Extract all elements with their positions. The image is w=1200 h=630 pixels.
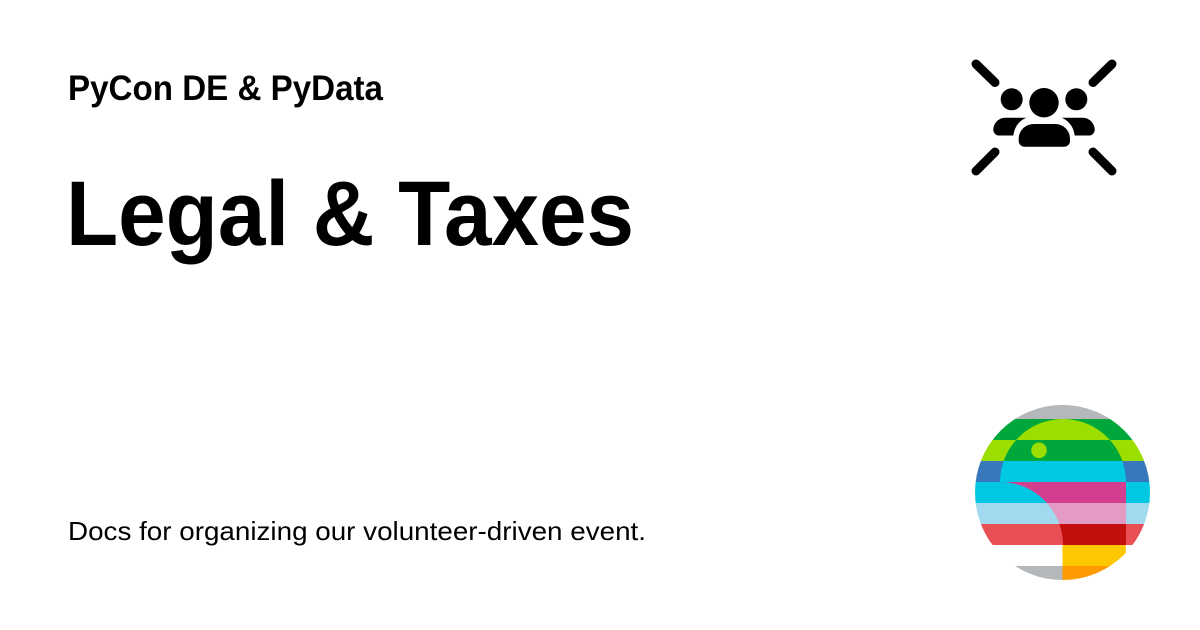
head quarter disc [1000, 482, 1063, 545]
logo: striped circular bird [975, 405, 1150, 580]
description: Docs for organizing our volunteer-driven event. [68, 516, 646, 546]
outer bands [975, 405, 1150, 545]
eye [1031, 442, 1047, 458]
social card [70, 60, 1150, 580]
inner dome bands [1000, 419, 1126, 545]
icon: people group with rays [976, 64, 1112, 171]
page title: Legal & Taxes [66, 163, 634, 265]
tail bands [1015, 545, 1126, 580]
kicker: site name: PyCon DE & PyData [68, 69, 383, 108]
